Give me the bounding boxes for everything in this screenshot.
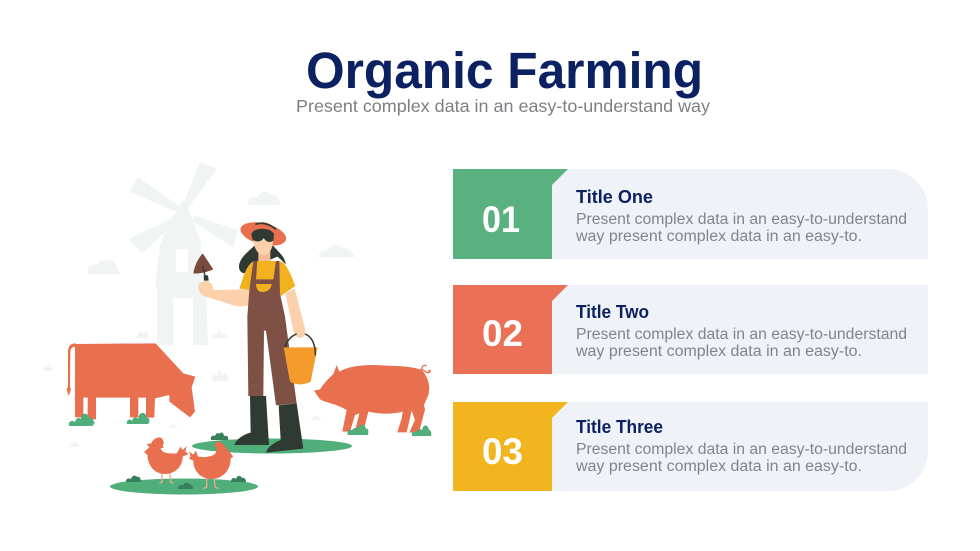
right arm [285,289,305,338]
hair [239,246,286,273]
chicken left [144,437,189,483]
card 3 number: 03 [482,431,523,472]
ground patch under farmer [192,438,352,454]
bucket handle [285,334,315,355]
overalls [247,261,297,405]
title: Organic Farming [306,42,703,99]
ground patch under chickens [110,478,258,494]
card 1 background [552,169,928,259]
card 3 body: Present complex data in an easy-to-understand [576,441,907,458]
hat [238,218,289,250]
pig [314,365,430,433]
dark grass tufts [126,433,246,489]
card 3 body: way present complex data in an easy-to. [575,458,862,475]
card 2 body: Present complex data in an easy-to-understand [576,326,907,343]
card 2 [453,285,928,374]
card 1 title: Title One [576,186,653,207]
card 2 number: 02 [482,313,523,354]
trowel handle [203,266,205,277]
face [253,237,273,255]
card 3 number tab [453,402,568,491]
chicken right [189,441,233,489]
card 2 title: Title Two [576,301,649,322]
hat crown [255,222,276,229]
grass under cow and pig [69,413,431,436]
farmer woman with trowel and bucket [193,218,318,453]
trowel [193,253,213,273]
card 2 body: way present complex data in an easy-to. [575,343,862,360]
card 1 body: Present complex data in an easy-to-understand [576,211,907,228]
illustration: organic farm scene [43,162,431,494]
card 2 number tab [453,285,568,374]
shirt [239,261,295,296]
boots [234,396,303,453]
bucket [284,347,318,384]
sunglasses hair [251,229,274,242]
faint grass tufts [43,330,322,447]
pocket [256,284,272,292]
raised arm [198,281,249,306]
neck [258,250,270,265]
cow [67,343,195,419]
card 2 background [552,285,928,374]
hat band [255,223,276,229]
card 1 [453,169,928,259]
card 3 title: Title Three [576,416,663,437]
card 1 body: way present complex data in an easy-to. [575,228,862,245]
card 1 number tab [453,169,568,259]
card 1 number: 01 [482,199,520,240]
card 3 [453,402,928,491]
background windmill [129,162,238,345]
card 3 background [552,402,928,491]
subtitle: Present complex data in an easy-to-understand way [296,96,710,116]
background clouds [88,192,355,274]
